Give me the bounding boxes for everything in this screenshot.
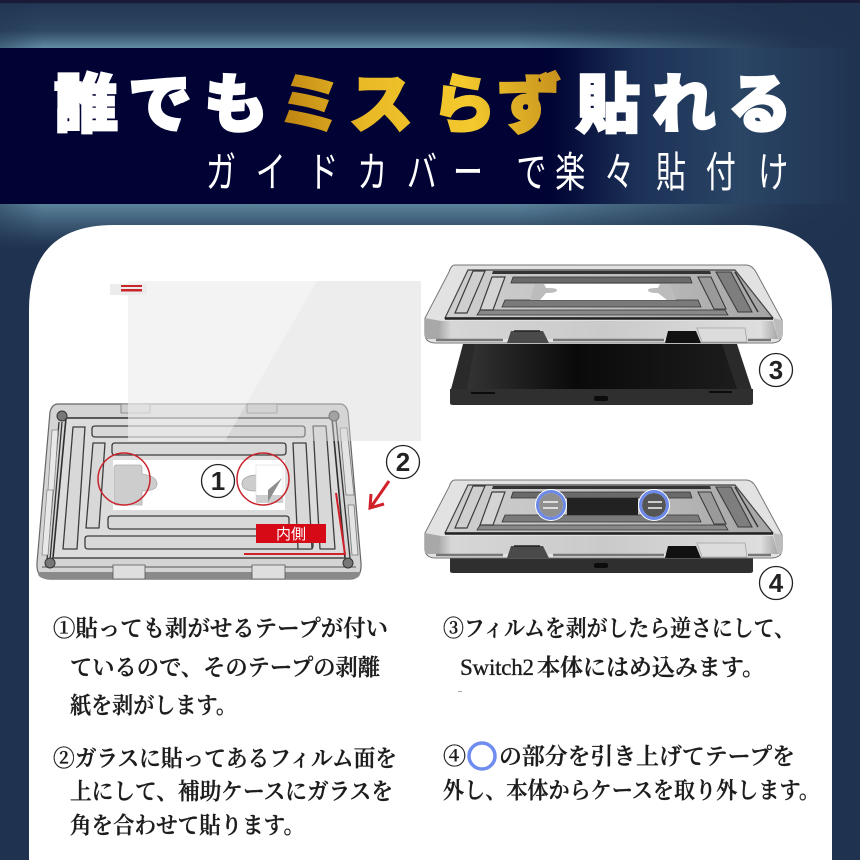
tray window dark bbox=[567, 498, 638, 515]
instruction: step 1: 紙を剥がします。 bbox=[70, 693, 237, 718]
tray window bbox=[540, 284, 667, 300]
white content panel bbox=[29, 225, 832, 860]
illustration: step 3, tray above console bbox=[425, 265, 792, 405]
tray window tabs bbox=[530, 284, 676, 300]
red corner guide lines bbox=[244, 493, 345, 554]
instruction: step 4 bbox=[443, 743, 820, 803]
step marker 3: 3 bbox=[769, 355, 783, 385]
instruction: step 4: の部分を引き上げてテープを bbox=[499, 744, 795, 769]
title: white end: 貼れる bbox=[576, 69, 792, 141]
instruction: step 2: 角を合わせて貼ります。 bbox=[70, 813, 305, 838]
instruction: step 3: 本体にはめ込みます。 bbox=[537, 655, 765, 680]
instruction: step 3 bbox=[443, 616, 795, 680]
guide tray bbox=[425, 480, 782, 558]
red circle: left tape bbox=[98, 453, 150, 505]
title bbox=[54, 69, 792, 141]
inline blue circle bbox=[469, 743, 495, 769]
illustration: step 4, tray on console bbox=[425, 480, 792, 600]
subtitle: ガイドカバーで楽々貼付け bbox=[206, 149, 788, 196]
glass sticker bbox=[110, 284, 147, 295]
title: white lead: 誰でも bbox=[54, 69, 268, 141]
instruction: step 4: ④ bbox=[443, 744, 466, 769]
instruction: step 2 bbox=[53, 746, 397, 838]
blue highlight right bbox=[638, 489, 670, 521]
instruction: step 4: 外し、本体からケースを取り外します。 bbox=[443, 778, 820, 803]
double-sided tape left bbox=[114, 465, 157, 505]
step marker 4 bbox=[760, 566, 792, 600]
instruction: step 3: Switch2 bbox=[460, 655, 534, 680]
red arrow bbox=[370, 481, 389, 508]
step marker 2 bbox=[386, 446, 420, 478]
guide tray bbox=[37, 404, 361, 579]
inner side label: 内側 bbox=[276, 526, 306, 543]
step marker 4: 4 bbox=[769, 568, 784, 598]
inner side label bbox=[256, 524, 326, 543]
background: side shading bbox=[0, 0, 860, 252]
instruction: step 1 bbox=[53, 616, 388, 718]
double-sided tape right bbox=[242, 465, 283, 503]
step marker 3 bbox=[760, 354, 792, 386]
instruction: step 2: ②ガラスに貼ってあるフィルム面を bbox=[53, 746, 397, 771]
stray mark bbox=[458, 691, 462, 692]
background: top glow bbox=[0, 4, 860, 48]
instruction: step 3: ③フィルムを剥がしたら逆さにして、 bbox=[443, 616, 795, 641]
step marker 2: 2 bbox=[396, 447, 410, 477]
title: gold emphasis: ミスらず bbox=[278, 69, 561, 141]
instruction: step 1: ①貼っても剥がせるテープが付い bbox=[53, 616, 388, 641]
console bbox=[450, 550, 753, 573]
illustration: tray with glass, steps 1 and 2 bbox=[37, 281, 421, 579]
console port details bbox=[594, 563, 608, 568]
step marker 1 bbox=[202, 464, 234, 498]
red circle: right tape bbox=[237, 453, 289, 505]
glass sheet bbox=[128, 281, 421, 441]
blue highlight left bbox=[535, 489, 567, 521]
background: lower glow bbox=[0, 204, 860, 250]
guide tray bbox=[425, 265, 782, 343]
step marker 1: 1 bbox=[211, 466, 225, 496]
instruction: step 2: 上にして、補助ケースにガラスを bbox=[70, 779, 393, 804]
title band bbox=[0, 48, 860, 204]
top accent line bbox=[0, 0, 860, 3]
instruction: step 1: ているので、そのテープの剥離 bbox=[70, 655, 380, 680]
console bbox=[450, 344, 753, 405]
